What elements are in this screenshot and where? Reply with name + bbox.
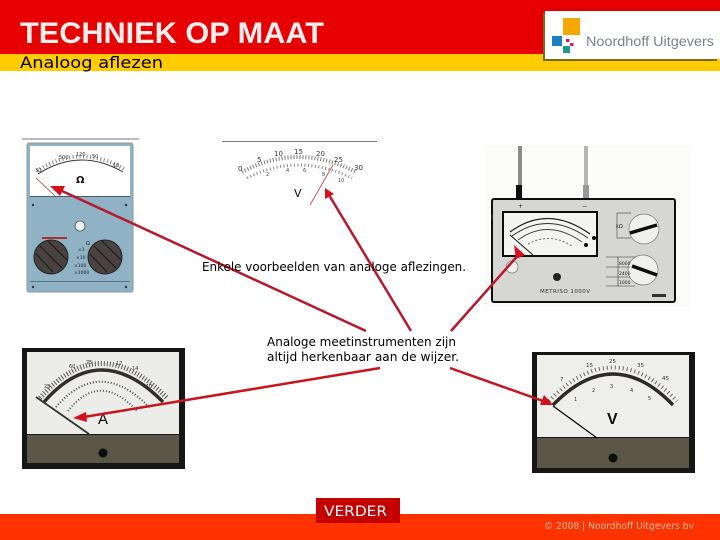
- meter: ohm meter: 50: [92, 154, 98, 160]
- meter: Metriso 1000V: 1000: [619, 280, 631, 286]
- meter: volt scale: [222, 141, 377, 205]
- meter: ohm meter: ×100: [74, 263, 86, 269]
- meter: volt scale: 6: [303, 168, 306, 174]
- subtitle: Analoog aflezen: [20, 53, 163, 72]
- meter: Metriso 1000V: −: [582, 203, 587, 210]
- meter: volt panel meter: 45: [662, 376, 669, 382]
- meter: volt scale: 0: [238, 165, 242, 173]
- meter: ohm meter: ×1: [78, 247, 85, 253]
- meter: volt panel meter: 4: [630, 388, 633, 394]
- meter: volt panel meter: 25: [609, 359, 616, 365]
- meter: volt scale: 4: [286, 168, 289, 174]
- meter: volt scale: 10: [274, 150, 283, 158]
- meter: volt scale: 5: [257, 156, 261, 164]
- meter: Metriso 1000V: METRISO 1000V: [540, 289, 590, 295]
- meter: volt panel meter: 35: [637, 363, 644, 369]
- meter: ohm meter: ×1000: [74, 270, 89, 276]
- meter: volt panel meter: 5: [648, 396, 651, 402]
- meter: ohm meter: 500: [59, 155, 69, 161]
- meter: volt panel meter: 7: [560, 377, 564, 383]
- meter: volt scale: 25: [334, 156, 343, 164]
- meter: ampere meter: 60: [69, 364, 75, 370]
- meter: volt panel meter: 1: [574, 397, 577, 403]
- meter: ohm meter: ×10: [76, 255, 86, 261]
- meter: volt panel meter: 2: [592, 388, 595, 394]
- caption: pointer note: Analoge meetinstrumenten zijn: [267, 335, 456, 349]
- meter: Metriso 1000V: [485, 146, 690, 307]
- title: TECHNIEK OP MAAT: [20, 17, 324, 50]
- meter: volt scale: 8: [322, 172, 325, 178]
- meter: volt scale: 2: [266, 172, 269, 178]
- meter: volt panel meter: [532, 352, 695, 473]
- arrow: to ohm meter: [50, 186, 366, 331]
- meter: ampere meter: 17: [116, 361, 122, 367]
- meter: ampere meter: 14: [132, 366, 138, 372]
- meter: ampere meter: 25: [44, 384, 50, 390]
- header band: [0, 0, 720, 71]
- logo: Noordhoff Uitgevers: [543, 11, 720, 61]
- arrow: to Metriso meter: [451, 245, 525, 331]
- meter: Metriso 1000V: 8000: [619, 261, 631, 267]
- meter: ohm meter: [22, 138, 139, 292]
- button: verder: [316, 498, 400, 523]
- arrow: to volt scale: [325, 188, 411, 331]
- meter: Metriso 1000V: +: [518, 203, 523, 210]
- meter: volt scale: 30: [354, 164, 363, 172]
- meter: ampere meter: 10: [146, 384, 152, 390]
- meter: ohm meter: 120: [76, 152, 86, 158]
- meter: ohm meter: Ω: [86, 241, 90, 247]
- meter: ohm meter: 30: [35, 168, 41, 174]
- footer band: [0, 514, 720, 540]
- meter: ohm meter: Ω: [76, 175, 85, 186]
- arrow: to ampere meter: [73, 368, 380, 422]
- meter: ampere meter: [22, 348, 185, 469]
- meter: Metriso 1000V: 2400: [619, 271, 631, 277]
- meter: ohm meter: 10: [113, 163, 119, 169]
- meter: volt scale: 20: [316, 150, 325, 158]
- copyright: © 2008 | Noordhoff Uitgevers bv: [544, 521, 694, 532]
- meter: volt panel meter: V: [607, 411, 618, 428]
- meter: ampere meter: 75: [86, 360, 92, 366]
- meter: volt scale: 15: [294, 148, 303, 156]
- arrow: to volt panel meter: [450, 368, 553, 405]
- meter: volt scale: 10: [338, 178, 344, 184]
- caption: pointer note: [267, 335, 459, 364]
- meter: ampere meter: A: [98, 411, 108, 428]
- meter: volt panel meter: 3: [610, 384, 613, 390]
- meter: Metriso 1000V: kΩ: [616, 224, 623, 230]
- caption: examples: Enkele voorbeelden van analoge aflezingen.: [202, 260, 466, 274]
- caption: pointer note: altijd herkenbaar aan de wijzer.: [267, 350, 459, 364]
- button: verder: VERDER: [324, 504, 387, 520]
- meter: volt scale: V: [294, 187, 302, 200]
- logo: Noordhoff Uitgevers: Noordhoff Uitgevers: [586, 34, 714, 49]
- meter: volt panel meter: 15: [586, 363, 593, 369]
